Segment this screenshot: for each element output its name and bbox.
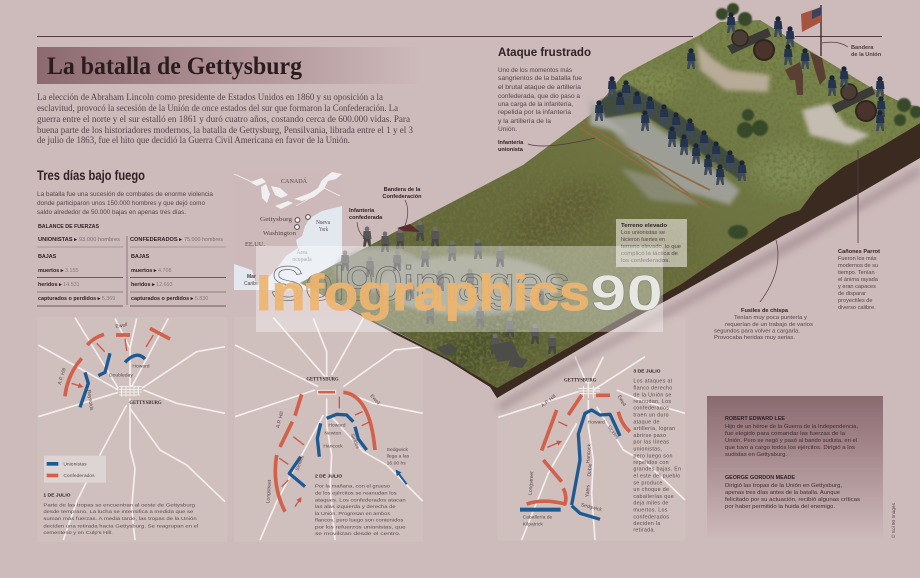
watermark: Sol90images [270,258,570,311]
callout: terreno elevado: Terreno elevado [621,223,668,229]
labels: Doubleday [109,373,133,379]
roads [498,357,685,540]
george g. meade: GEORGE GORDON MEADE [725,475,795,481]
day text: la Unión. Progresan en ambos [315,511,391,517]
place labels: EE.UU. [245,242,266,248]
place labels: CANADÁ [281,177,308,185]
labels: Ewell [115,322,128,330]
callout: terreno elevado: Los unionistas se [621,230,665,236]
callout: infanteria unionista: unionista [498,147,524,153]
place labels: York [319,227,328,233]
panel: 2 de julio map [234,317,425,542]
callout: canones parrot [838,150,880,311]
panel: 3 de julio map [497,317,686,541]
robert e. lee: sudistas en Gettysburg. [725,452,788,458]
labels: Howard [328,422,346,428]
callout: canones parrot: proyectiles de [838,298,873,304]
callout: canones parrot: el ánima rayada [838,277,879,283]
day text: suman más fuerzas. A media tarde, las tropas de la Unión [43,516,197,522]
intro text: guerra entre el norte y el sur estalló en 1861 y duró cuatro años, costando cerca de 600.000 vidas. Para [37,115,411,125]
day text: ataque de [633,419,660,425]
day text: el este del pueblo [633,474,681,480]
day text [633,368,681,534]
day text: pero luego son [633,453,673,459]
union cannons [727,28,876,121]
description [37,191,213,216]
labels: GETTYSBURG [306,378,339,383]
day text: Por la mañana, con el grueso [315,484,390,490]
labels: Hancock [585,443,593,463]
confederate lines [527,395,630,504]
callout: bandera de la union: de la Unión [851,52,882,58]
panel: tres dias bajo fuego [37,168,226,306]
callout: fusiles de chispa: Fusiles de chispa [741,308,789,314]
labels: GETTYSBURG [564,379,597,384]
panel: 1 de julio map [37,317,227,542]
day text: por los refuerzos unionistas, que [315,524,406,530]
labels: Sickles [606,424,620,441]
roads [38,318,225,540]
trees [716,3,920,239]
union lines [289,414,407,487]
day text: 2 DE JULIO [315,473,342,479]
union lines [80,353,145,407]
balance table: BAJAS [38,254,57,260]
balance table: CONFEDERADOS ▸ [130,237,183,243]
day text: desde temprano. La lucha se intensifica a medida que se [43,509,194,515]
heading and text: ataque frustrado: Uno de los momentos más [498,67,572,74]
day text: muertos. Los [633,507,668,513]
callout: infanteria unionista [498,138,595,153]
labels: A.P. Hill [540,394,557,409]
balance table: 75.000 hombres [184,237,224,243]
callout: fusiles de chispa [714,240,813,341]
labels: Sickles [349,433,360,450]
labels: A.P. Hill [275,411,285,429]
callout: fusiles de chispa: segundos para volver a cargarla. [714,328,800,334]
grass [300,20,920,388]
day text: flancos, pero luego son contenidos [315,518,404,524]
robert e. lee: ROBERT EDWARD LEE [725,416,785,422]
callout: bandera de la union [822,42,882,58]
labels: Sedgwick [580,502,603,513]
callout: bandera de la confederacion: Bandera de la [384,187,421,193]
heading and text: ataque frustrado: y la artillería de la [498,118,551,125]
heading and text: ataque frustrado: confederada, que dio paso a [498,93,580,100]
horses [785,52,826,95]
day text: flanco derecho [633,385,672,391]
dark mass behind the union line [600,85,745,180]
heading and text: ataque frustrado: sangrientos de la batalla fue [498,75,582,82]
confederate lines [65,328,170,396]
day text: reanudan. Los [633,399,671,405]
callout: terreno elevado: hicieron fuertes en [621,237,665,243]
day text: 1 DE JULIO [43,492,71,498]
callout: canones parrot: Fueron los más [838,256,877,262]
callout: infanteria confederada [349,208,383,241]
day text: confederados [633,406,669,412]
callout: infanteria confederada: Infantería [349,208,375,214]
callout: bandera de la union: Bandera [851,45,874,51]
robert e. lee [725,416,858,458]
callout: canones parrot: diverso calibre. [838,305,876,311]
day text: las alas izquierda y derecha de [315,504,396,510]
day text: traen un duro [633,413,669,419]
day text: deja miles de [633,501,669,507]
day text: un choque de [633,487,669,493]
place labels [244,177,330,287]
day text: retirada. [633,528,656,534]
day text: repelidos con [633,460,669,466]
place labels: Gettysburg [260,217,292,223]
balance table: muertos ▸ 4.708 [131,268,171,274]
day text: ataques. Los confederados atacan [315,497,406,503]
description: donde participaron unos 150.000 hombres y que dejó como [37,200,205,207]
day text: grandes bajas. En [633,467,681,473]
watermark: Infographics [256,265,590,321]
day text [315,473,406,537]
intro text: La elección de Abraham Lincoln como presidente de Estados Unidos en 1860 y su oposición a la [37,93,384,103]
callout: terreno elevado [616,219,687,267]
balance table: heridos ▸ 12.693 [131,282,173,288]
legend [44,456,106,483]
place labels: Caribe [244,281,259,287]
george g. meade: por haber permitido la huida del enemigo. [725,504,836,510]
heading and text: ataque frustrado: una carga de la infantería, [498,101,573,108]
watermark: 90 [590,265,663,321]
balance table: UNIONISTAS ▸ [38,237,78,243]
heading: Tres días bajo fuego [37,168,145,183]
great lakes [250,172,342,209]
day text: caballerías que [633,494,674,500]
labels: Reynolds [85,389,94,411]
day text: Parte de las tropas se encuentran al oeste de Gettysburg [43,502,195,508]
day text: se movilizan desde el centro. [315,531,401,537]
labels: Ewell [369,393,381,406]
callout: terreno elevado: los confederados. [621,258,670,264]
confederate flag [397,224,420,232]
grass shading and texture [300,20,920,391]
intro text: esclavitud, provocó la secesión de la Unión de once estados del sur que formaron la Confederación. La [37,103,399,114]
labels: Howard [588,419,605,425]
wooden fence [580,122,710,208]
balance table: heridos ▸ 14.531 [38,282,80,288]
robert e. lee: Hijo de un héroe de la Guerra de la Independencia, [725,424,858,430]
title band [37,36,882,84]
callout: infanteria unionista: Infantería [498,140,524,146]
confederate lines [275,390,375,512]
labels [265,378,410,503]
town [119,386,142,397]
watermark [256,246,663,332]
callout: bandera de la confederacion: Confederación [382,194,422,200]
labels: Doble [587,463,594,477]
callout: fusiles de chispa: Tenían muy poca puntería y [734,315,807,321]
place labels: Nueva [316,220,330,226]
diorama battlefield [300,3,920,412]
labels: A.P. Hill [57,368,68,386]
day text: unionistas, [633,446,662,452]
callout: infanteria confederada: confederada [349,215,383,221]
callout: bandera de la confederacion [382,187,422,228]
legend: Unionistas [63,461,87,467]
intro text [37,93,413,146]
labels: Kilpatrick [523,522,543,528]
image credit: © Sol 90 Images [890,502,896,538]
day text: confederados [633,514,669,520]
union soldiers on the hill [687,12,886,131]
labels: Hancock [323,444,343,450]
george g. meade: apenas tres días antes de la batalla. Aunque [725,490,840,496]
place labels: Mar [247,274,256,280]
legend: Confederados [63,473,95,479]
place labels: ocupada [292,257,312,263]
balance table: muertos ▸ 3.155 [38,268,78,274]
day text: Los ataques al [633,379,672,385]
heading and text: ataque frustrado [498,47,591,133]
day text: abrirse paso [633,433,666,439]
day text [43,492,198,536]
cast shadow [497,166,920,412]
labels: Sickles [295,454,306,472]
day text: deciden la [633,521,661,527]
town [578,386,600,398]
intro text: de julio de 1863, fue el hito que decidió la Guerra Civil Americana en favor de la Unión. [37,135,350,146]
heading and text: ataque frustrado: el brutal ataque de artillería [498,84,581,91]
callout: fusiles de chispa: Provocaba heridas muy serias. [714,335,795,341]
day text: cementerio y en Culp's Hill. [43,530,113,536]
labels [523,379,627,528]
labels: Newton [324,431,341,437]
george g. meade [725,475,860,510]
george g. meade: Dirigió las tropas de la Unión en Gettysburg, [725,483,843,489]
labels [57,322,162,411]
balance table: capturados o perdidos ▸ 5.830 [131,296,208,302]
base soil [300,123,920,398]
labels: Ewell [616,394,627,407]
title band: La batalla de Gettysburg [47,53,302,80]
labels: 16.00 hs [387,460,406,466]
callout: canones parrot: Cañones Parrot [838,249,880,255]
day text: se produce [633,480,663,486]
locator map [234,170,342,290]
callout: canones parrot: modernos de su [838,263,878,269]
labels: Longstreet [528,471,535,495]
fortifications and smoke [335,42,870,315]
balance table: BALANCE DE FUERZAS [38,224,99,230]
labels: Caballería de [523,515,553,521]
balance table: 93.000 hombres [79,237,121,243]
balance table: BAJAS [131,254,150,260]
balance table: capturados o perdidos ▸ 5.369 [38,296,115,302]
water [234,206,342,290]
heading and text: ataque frustrado: repelida por la infantería [498,109,571,116]
heading and text: ataque frustrado: Unión. [498,126,517,133]
day text: por las líneas [633,440,669,446]
panel: generales [707,396,883,539]
day text: de la Unión se [633,392,672,398]
callout: canones parrot: de disparar [838,291,866,297]
labels: GETTYSBURG [129,401,162,406]
day text: deciden una retirada hacia Gettysburg. Se reagrupan en el [43,523,198,529]
union lines [520,410,620,519]
robert e. lee: fue elegido para comandar las fuerzas de la [725,431,846,437]
labels: Yates [585,484,592,497]
description: La batalla fue una sucesión de combates de enorme violencia [37,191,213,198]
city markers [295,215,310,229]
union infantry line [595,76,746,185]
labels: Howard [132,363,150,369]
day text: de los ejércitos se reanudan los [315,490,397,496]
robert e. lee: que tuvo a cargo todos los ejércitos. Dirigió a los [725,445,855,451]
george g. meade: felicitado por su actuación, recibió algunas críticas [725,497,860,503]
heading and text: ataque frustrado: Ataque frustrado [498,47,591,59]
balance table [37,224,226,306]
description: saldo alrededor de 50.000 bajas en apenas tres días. [37,209,186,216]
confederate infantry [341,220,556,368]
union flag [801,5,821,56]
callout: canones parrot: tiempo. Tenían [838,270,875,276]
labels: Longstreet [265,479,273,503]
callout: canones parrot: y eran capaces [838,284,876,290]
callout: terreno elevado: complicó la táctica de [621,251,678,257]
labels: Sedgwick [387,447,409,453]
place labels: Área [296,248,308,256]
intro text: buena parte de los historiadores modernos, la batalla de Gettysburg, Pensilvania, librada entre el 1 y el 3 [37,126,413,136]
labels: llega a las [387,454,410,460]
place labels: Washington [263,231,296,237]
roads [235,318,425,540]
day text: 3 DE JULIO [633,368,661,374]
callout: terreno elevado: terreno elevado, lo que [621,244,681,250]
callout: fusiles de chispa: requerían de un trabajo de varios [725,322,813,328]
day text: artillería, logran [633,426,675,432]
robert e. lee: Unión. Pero se negó y pasó al bando sudista, en el [725,438,857,444]
